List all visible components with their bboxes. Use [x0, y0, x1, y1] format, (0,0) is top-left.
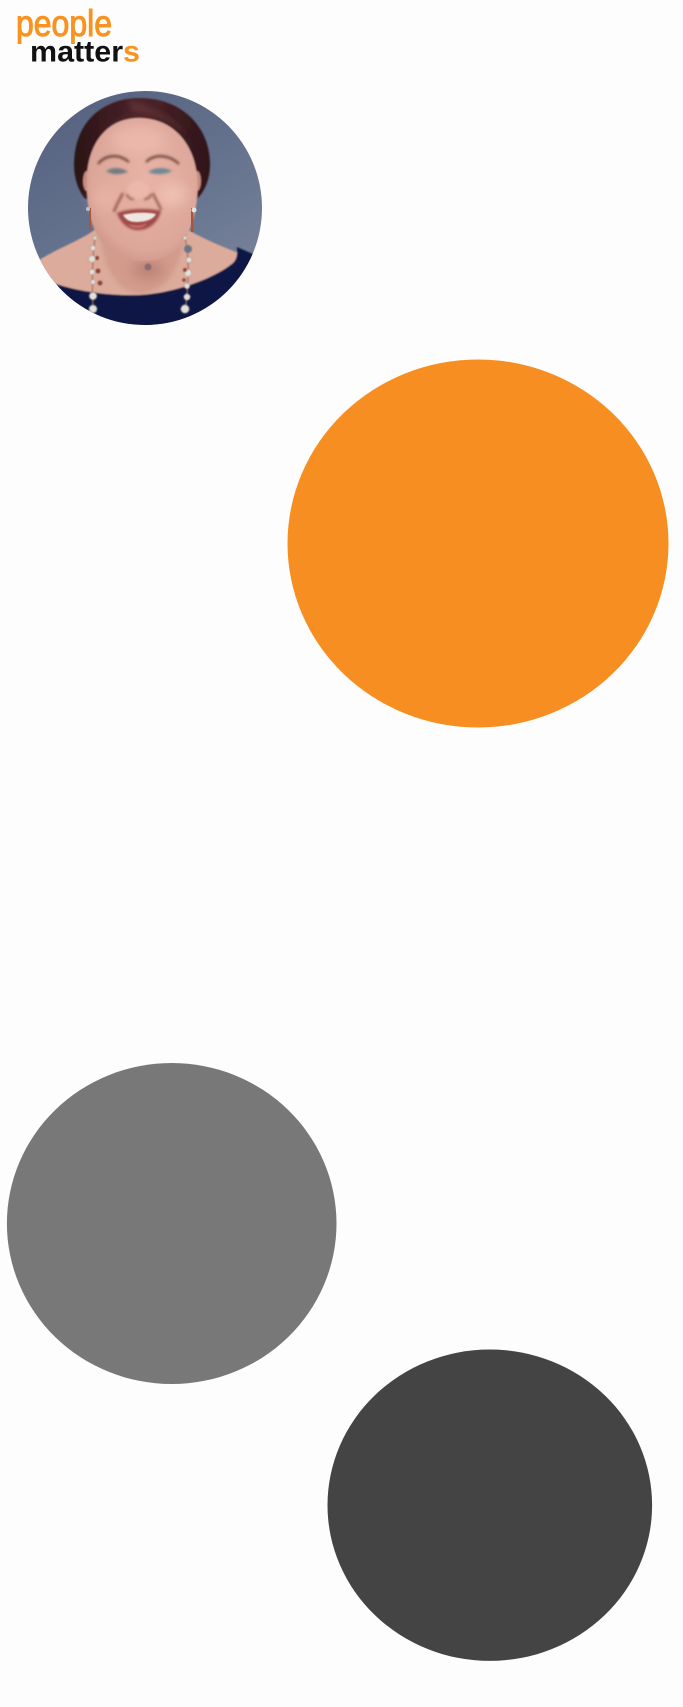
logo: people matters — [16, 4, 140, 68]
orange circle — [288, 360, 668, 728]
facial features — [98, 156, 179, 230]
portrait photo — [28, 91, 262, 330]
face — [87, 118, 197, 261]
logo: people matters: matters — [30, 36, 140, 68]
dark grey circle — [328, 1350, 652, 1661]
necklace — [89, 236, 192, 313]
hair — [74, 98, 210, 199]
teeth — [123, 213, 156, 228]
earrings — [86, 207, 196, 232]
cheek highlights — [157, 183, 187, 207]
grey circle — [7, 1063, 336, 1384]
dress — [56, 246, 253, 325]
shoulders and neck — [40, 230, 238, 296]
ears — [82, 170, 88, 192]
logo: people matters: people — [16, 4, 112, 45]
